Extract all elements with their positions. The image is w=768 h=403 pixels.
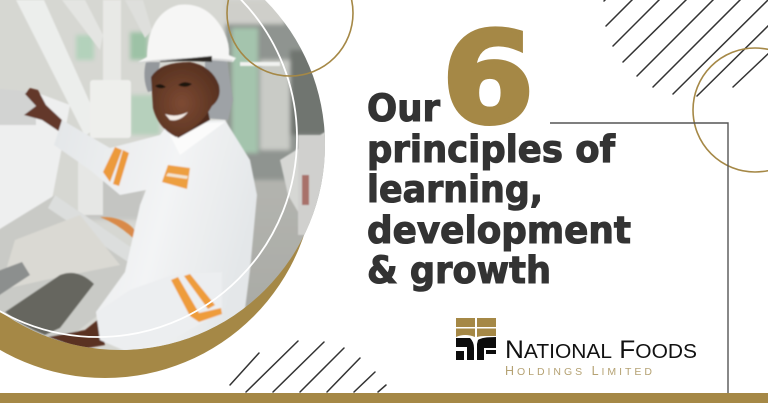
gold ring top — [227, 0, 353, 76]
photo: worker in white hard hat at mill machine — [0, 0, 330, 360]
dark grey chute — [5, 273, 94, 335]
thin white circle over photo — [0, 0, 297, 337]
gold bottom bar — [0, 393, 768, 403]
orange sleeve bands — [103, 147, 122, 182]
outline frame line — [550, 123, 728, 393]
neck — [176, 112, 211, 139]
ribbed roller — [0, 262, 30, 298]
orange machine part — [100, 217, 136, 238]
logo subline: Holdings Limited: H OLDINGS L IMITED — [505, 364, 652, 378]
title text: Our — [367, 87, 441, 130]
orange chest patch — [162, 165, 190, 189]
gold ring right — [693, 48, 768, 172]
title text: & growth — [367, 249, 551, 292]
lower hand — [48, 318, 105, 349]
machine base — [0, 195, 135, 345]
gold crescent behind photo — [0, 0, 315, 378]
orange cuff bands — [171, 277, 222, 322]
jacket body and sleeves — [54, 120, 257, 353]
photo background: factory interior — [0, 0, 330, 360]
hairnet — [144, 62, 160, 92]
title text: learning, — [367, 168, 543, 211]
machine lid — [0, 90, 70, 235]
logo wordmark: National Foods: NATIONAL FOODS — [505, 336, 697, 364]
diagonal lines bottom — [230, 341, 386, 392]
diagonal lines top right — [604, 0, 768, 96]
face — [151, 62, 220, 137]
big gold number 6: 6 — [442, 5, 534, 152]
title text: principles of — [367, 128, 616, 171]
raised hand — [24, 88, 62, 132]
hard hat — [138, 5, 236, 62]
title text — [367, 87, 631, 292]
eyes and smile — [155, 82, 192, 88]
title text: development — [367, 209, 631, 252]
logo mark — [456, 318, 496, 360]
photo: pipes and machinery — [0, 0, 330, 353]
